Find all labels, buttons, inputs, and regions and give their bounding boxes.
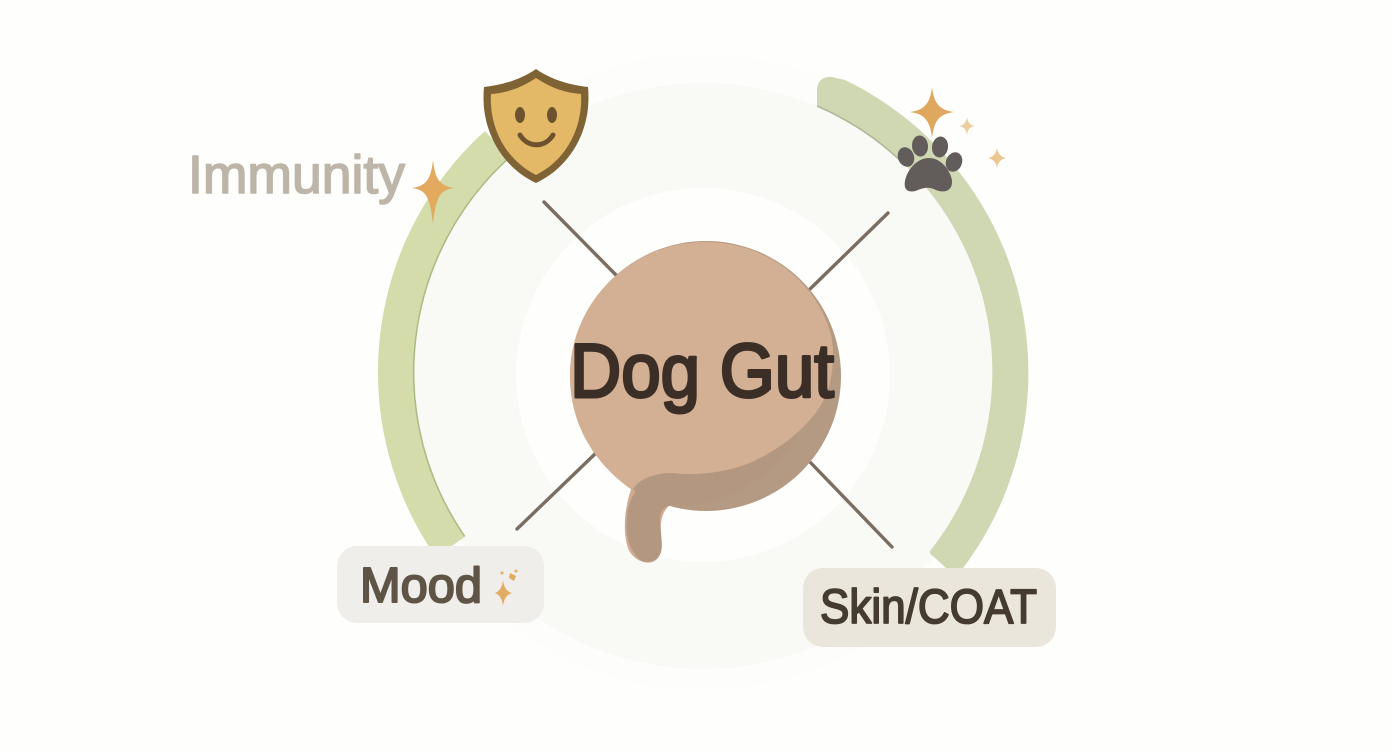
icon: smiling shield [483, 69, 589, 183]
gut body [570, 242, 833, 490]
label: Immunity: Immunity [188, 145, 405, 205]
gut shadow [571, 241, 841, 511]
inner white circle [516, 188, 890, 562]
pale background ring [410, 83, 996, 669]
gut tail shade [626, 433, 800, 562]
label panel: Mood [337, 546, 544, 623]
label panel: Mood: Mood [360, 559, 482, 613]
right green arc [817, 77, 1028, 577]
gut illustration [570, 241, 841, 563]
icon: paw print [895, 135, 965, 191]
icon: sparkles by paw [910, 87, 1006, 168]
icon: Mood sparkles [495, 570, 518, 606]
gut tail base [625, 482, 700, 563]
connector lines [517, 202, 892, 547]
label panel: Skin/COAT [803, 568, 1056, 647]
icon: sparkle by Immunity [412, 160, 454, 224]
outer halo ring [385, 54, 1021, 690]
left green arc [396, 144, 510, 547]
title: Dog Gut: Dog Gut [570, 329, 834, 414]
label panel: Skin/COAT: Skin/COAT [820, 581, 1037, 634]
